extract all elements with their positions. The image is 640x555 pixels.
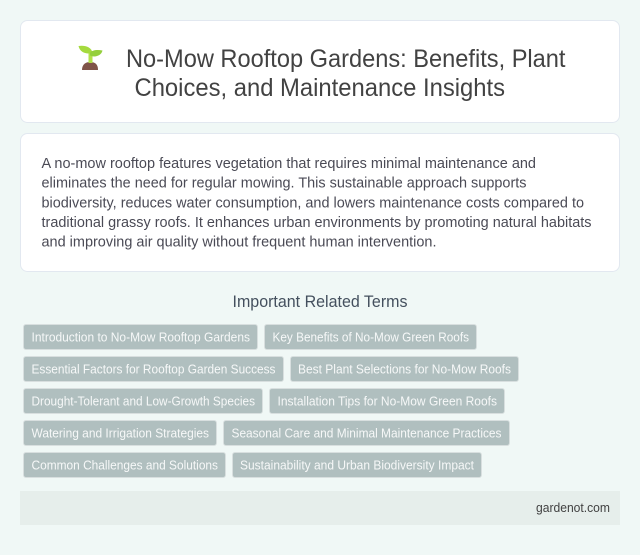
tag: sustainability: Sustainability and Urban Biodiversity Impact xyxy=(240,458,474,472)
text block: description: biodiversity, reduces water consumption, and lowers maintenance costs compared to xyxy=(42,196,584,212)
tag list: related terms xyxy=(24,324,518,478)
tag: key benefits: Key Benefits of No-Mow Green Roofs xyxy=(272,330,469,344)
text block: description: and improving air quality without frequent human intervention. xyxy=(42,234,436,250)
title: Choices, and Maintenance Insights xyxy=(134,74,505,102)
tag: essential factors xyxy=(24,356,284,382)
tag: common challenges xyxy=(24,452,226,478)
heading: related terms: Important Related Terms xyxy=(232,293,408,311)
panel: title header xyxy=(20,20,620,122)
tag: installation tips xyxy=(270,388,504,414)
tag: introduction: Introduction to No-Mow Rooftop Gardens xyxy=(32,330,250,344)
text block: description: A no-mow rooftop features vegetation that requires minimal maintenance and xyxy=(42,156,536,172)
text block: description: eliminates the need for regular mowing. This sustainable approach supports xyxy=(42,176,526,192)
tag: watering strategies: Watering and Irrigation Strategies xyxy=(32,426,209,440)
panel: description xyxy=(20,134,620,272)
title: No-Mow Rooftop Gardens: Benefits, Plant xyxy=(126,45,566,73)
tag: common challenges: Common Challenges and Solutions xyxy=(32,458,218,472)
tag: seasonal care: Seasonal Care and Minimal Maintenance Practices xyxy=(232,426,502,440)
text block: description: traditional grassy roofs. It enhances urban environments by promoting natural habitats xyxy=(42,215,592,231)
icon: seedling xyxy=(78,46,102,70)
tag: sustainability xyxy=(232,452,482,478)
tag: best plant selections: Best Plant Selections for No-Mow Roofs xyxy=(298,362,511,376)
text block: description xyxy=(42,156,592,250)
tag: installation tips: Installation Tips for No-Mow Green Roofs xyxy=(278,394,497,408)
tag: introduction xyxy=(24,324,258,350)
tag: seasonal care xyxy=(224,420,510,446)
tag: essential factors: Essential Factors for Rooftop Garden Success xyxy=(32,362,276,376)
title xyxy=(126,45,566,102)
tag: drought-tolerant species xyxy=(24,388,262,414)
tag: watering strategies xyxy=(24,420,216,446)
footer xyxy=(20,491,620,525)
tag: drought-tolerant species: Drought-Tolerant and Low-Growth Species xyxy=(32,394,255,408)
tag: key benefits xyxy=(264,324,476,350)
tag: best plant selections xyxy=(290,356,518,382)
footer source label: gardenot.com xyxy=(536,501,610,515)
